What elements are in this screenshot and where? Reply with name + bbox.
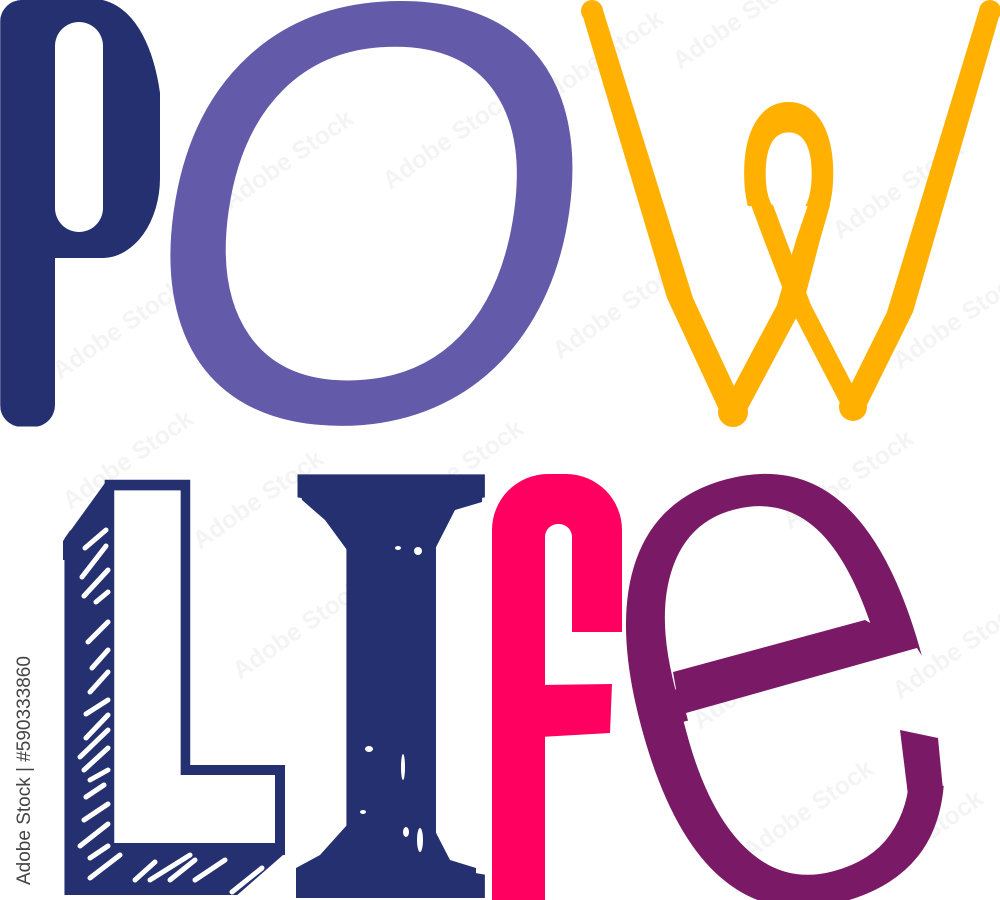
watermark: Adobe Stock: [227, 574, 369, 685]
letter f: [492, 474, 622, 900]
letter L: [63, 480, 285, 895]
watermark: Adobe Stock: [57, 404, 199, 515]
watermark: Adobe Stock: [387, 414, 529, 525]
watermark: Adobe Stock: [547, 254, 689, 365]
watermark: Adobe Stock: [187, 444, 329, 555]
watermark: Adobe Stock: [217, 104, 359, 215]
letter W: O: [744, 74, 833, 275]
watermark: Adobe Stock: [47, 274, 189, 385]
watermark: Adobe Stock: [527, 4, 669, 115]
watermark: Adobe Stock: [737, 754, 879, 865]
watermark: Adobe Stock: [847, 784, 989, 895]
letter W: [581, 0, 1000, 427]
watermark: Adobe Stock: [377, 84, 519, 195]
watermark: Adobe Stock: [777, 424, 919, 535]
watermark: Adobe Stock: [827, 134, 969, 245]
vertical credit text: Adobe Stock | #590333860: [14, 656, 35, 885]
watermark: Adobe Stock: [687, 624, 829, 735]
